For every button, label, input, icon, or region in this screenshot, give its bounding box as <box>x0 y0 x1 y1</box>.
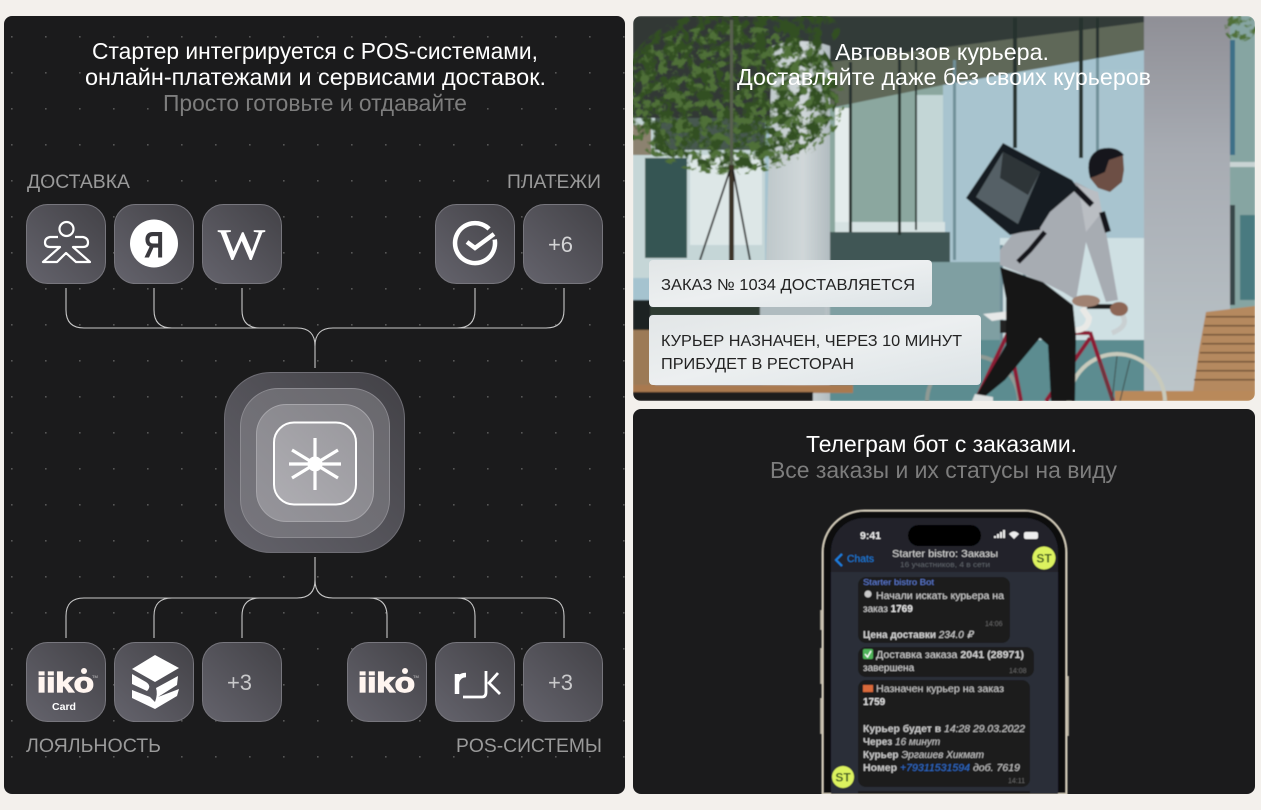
tile: stack icon <box>114 642 194 722</box>
chat header: 16 участников, 4 в сети <box>900 560 990 569</box>
brick stack <box>1193 306 1255 392</box>
connector lines: bottom <box>66 557 564 638</box>
tile: W icon <box>202 204 282 284</box>
message: searching courier: заказ 1769 <box>863 604 913 615</box>
heading: integrations: онлайн-платежами и сервисами доставок. <box>85 64 546 90</box>
label: payments: ПЛАТЕЖИ <box>507 171 601 193</box>
chat header: ST <box>1036 552 1052 566</box>
tile: iiko: iikо <box>358 667 415 698</box>
message: courier assigned <box>858 680 1030 787</box>
message: delivery complete: завершена <box>863 663 915 674</box>
panel: courier photo <box>633 16 1255 401</box>
connector lines: top <box>66 288 564 368</box>
label: POS systems: POS-СИСТЕМЫ <box>456 735 602 757</box>
wood at left <box>633 385 853 393</box>
central hub: Starter logo <box>224 372 404 552</box>
head <box>1090 154 1125 192</box>
tile: Yandex icon: Я <box>144 224 164 266</box>
tile: iiko Card <box>26 642 106 722</box>
hands <box>1072 295 1100 307</box>
message: delivery complete: 14:08 <box>1009 668 1027 675</box>
hoodie <box>1000 182 1118 302</box>
tile: iiko <box>348 642 426 722</box>
label: loyalty: ЛОЯЛЬНОСТЬ <box>26 735 161 757</box>
photo: street scene with cyclist <box>633 16 1255 401</box>
message: delivery complete <box>858 647 1034 677</box>
panel: integrations <box>4 16 625 794</box>
message: courier assigned: Номер +79311531594 доб. 7619 <box>863 762 1020 774</box>
heading: telegram bot: Телеграм бот с заказами. <box>806 431 1077 457</box>
status bar <box>860 530 1038 542</box>
tile: r_k icon <box>436 642 514 722</box>
heading: telegram bot: Все заказы и их статусы на виду <box>770 457 1117 483</box>
tile: plus six: +6 <box>548 232 573 257</box>
tile: plus six <box>524 204 602 284</box>
message: courier assigned: Курьер Эргашев Хикмат <box>863 750 984 761</box>
heading: courier autocall <box>737 44 1150 90</box>
middle windows <box>829 84 944 233</box>
side buttons <box>820 610 1069 736</box>
tile: plus three loyalty <box>202 642 282 722</box>
status card: order in delivery <box>649 260 932 307</box>
status bar: 9:41 <box>860 530 881 542</box>
chat header: Starter bistro: Заказы <box>892 548 998 560</box>
message: courier assigned: 14:11 <box>1008 778 1025 785</box>
message: searching courier: Цена доставки 234.0 ₽ <box>863 630 975 641</box>
tile: plus three POS: +3 <box>548 670 573 695</box>
status card: courier assigned: КУРЬЕР НАЗНАЧЕН, ЧЕРЕЗ 10 МИНУТ <box>661 333 962 350</box>
tile: courier service icon <box>26 204 106 284</box>
tile: Yandex icon <box>114 204 194 284</box>
tile: iiko Card: TM <box>92 674 98 679</box>
heading: integrations: Просто готовьте и отдавайте <box>163 90 467 116</box>
message: courier assigned: Назначен курьер на заказ <box>876 684 1004 695</box>
pants <box>976 267 1076 401</box>
tile: iiko Card: Card <box>52 701 76 713</box>
message: searching courier: Начали искать курьера на <box>876 591 1004 602</box>
tile: plus three loyalty: +3 <box>227 670 252 695</box>
tile: iiko: TM <box>413 674 419 679</box>
avatar: ST <box>835 770 851 784</box>
status card: courier assigned: ПРИБУДЕТ В РЕСТОРАН <box>661 356 854 373</box>
column 2 <box>1144 16 1230 401</box>
tile: Sber icon <box>436 204 514 284</box>
column 1 <box>762 41 830 401</box>
tile: iiko Card: iikо <box>37 667 94 698</box>
status card: order in delivery: ЗАКАЗ № 1034 ДОСТАВЛЯЕТСЯ <box>661 277 915 294</box>
heading: courier autocall: Доставляйте даже без своих курьеров <box>737 64 1151 90</box>
left upper dark wall <box>633 16 775 121</box>
avatar <box>832 766 854 788</box>
tile: plus three POS <box>524 642 602 722</box>
bicycle <box>924 330 1168 401</box>
bag <box>966 143 1078 235</box>
heading: courier autocall: Автовызов курьера. <box>835 39 1049 65</box>
label: delivery: ДОСТАВКА <box>27 171 130 193</box>
message: delivery complete: Доставка заказа 2041 (28971) <box>876 650 1024 661</box>
chat header: Chats <box>847 554 874 565</box>
message: courier assigned: 1759 <box>863 697 886 708</box>
left windows <box>633 118 765 278</box>
olive ceiling reflection <box>830 16 1145 108</box>
tree trunk <box>730 20 733 170</box>
message: searching courier <box>858 577 1010 643</box>
chat header <box>836 546 1056 570</box>
panel: telegram bot <box>633 409 1255 794</box>
message: searching courier: Starter bistro Bot <box>863 578 935 587</box>
straps <box>1018 232 1045 262</box>
ceiling <box>830 16 1144 62</box>
heading: integrations: Стартер интегрируется с POS-системами, <box>92 38 538 64</box>
message: courier assigned: Курьер будет в 14:28 29.03.2022 <box>863 723 1025 735</box>
message: courier assigned: Через 16 минут <box>863 737 940 748</box>
tile: W icon: W <box>218 222 265 269</box>
tree foliage <box>622 10 840 170</box>
phone mockup <box>820 510 1069 794</box>
next message <box>858 791 1030 794</box>
heading: integrations <box>85 38 546 116</box>
message: searching courier: 14:06 <box>985 621 1003 628</box>
right strip <box>1229 16 1255 310</box>
status card: courier assigned <box>649 315 981 385</box>
heading: telegram bot <box>770 431 1117 483</box>
